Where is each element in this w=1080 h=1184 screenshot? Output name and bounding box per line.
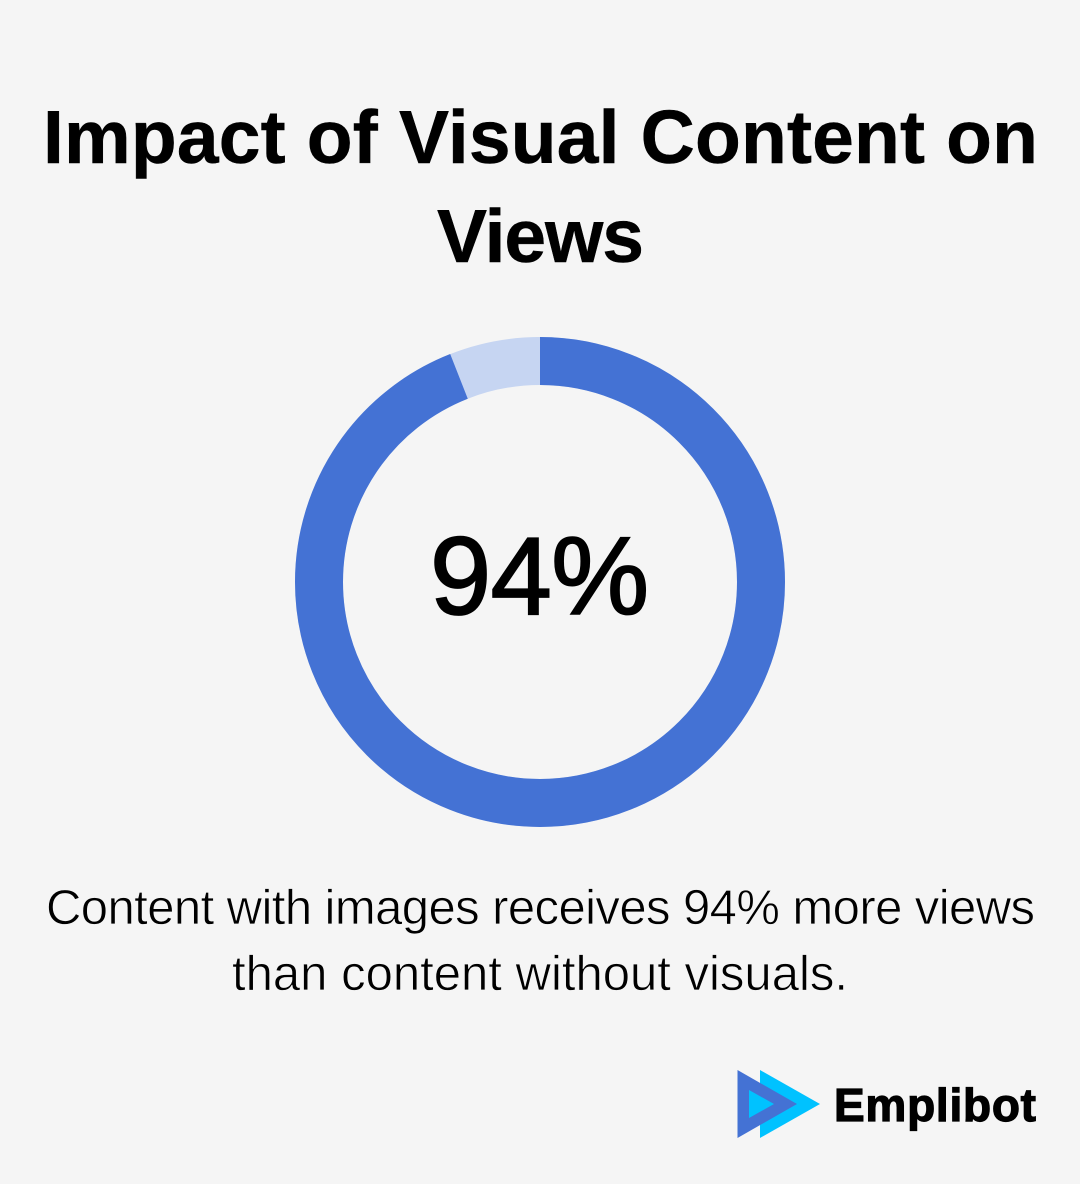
logo wordmark: Emplibot xyxy=(834,1079,1036,1131)
description text: Content with images receives 94% more views xyxy=(46,881,1035,935)
title: Views xyxy=(437,194,644,278)
logo: Emplibot xyxy=(738,1070,1036,1138)
description text xyxy=(46,881,1035,1001)
title: Impact of Visual Content on xyxy=(43,95,1038,179)
title xyxy=(43,95,1038,278)
icon: play triangles xyxy=(738,1070,820,1138)
donut chart: 94% xyxy=(319,361,761,803)
center value: 94% xyxy=(430,515,649,638)
description text: than content without visuals. xyxy=(232,947,848,1001)
